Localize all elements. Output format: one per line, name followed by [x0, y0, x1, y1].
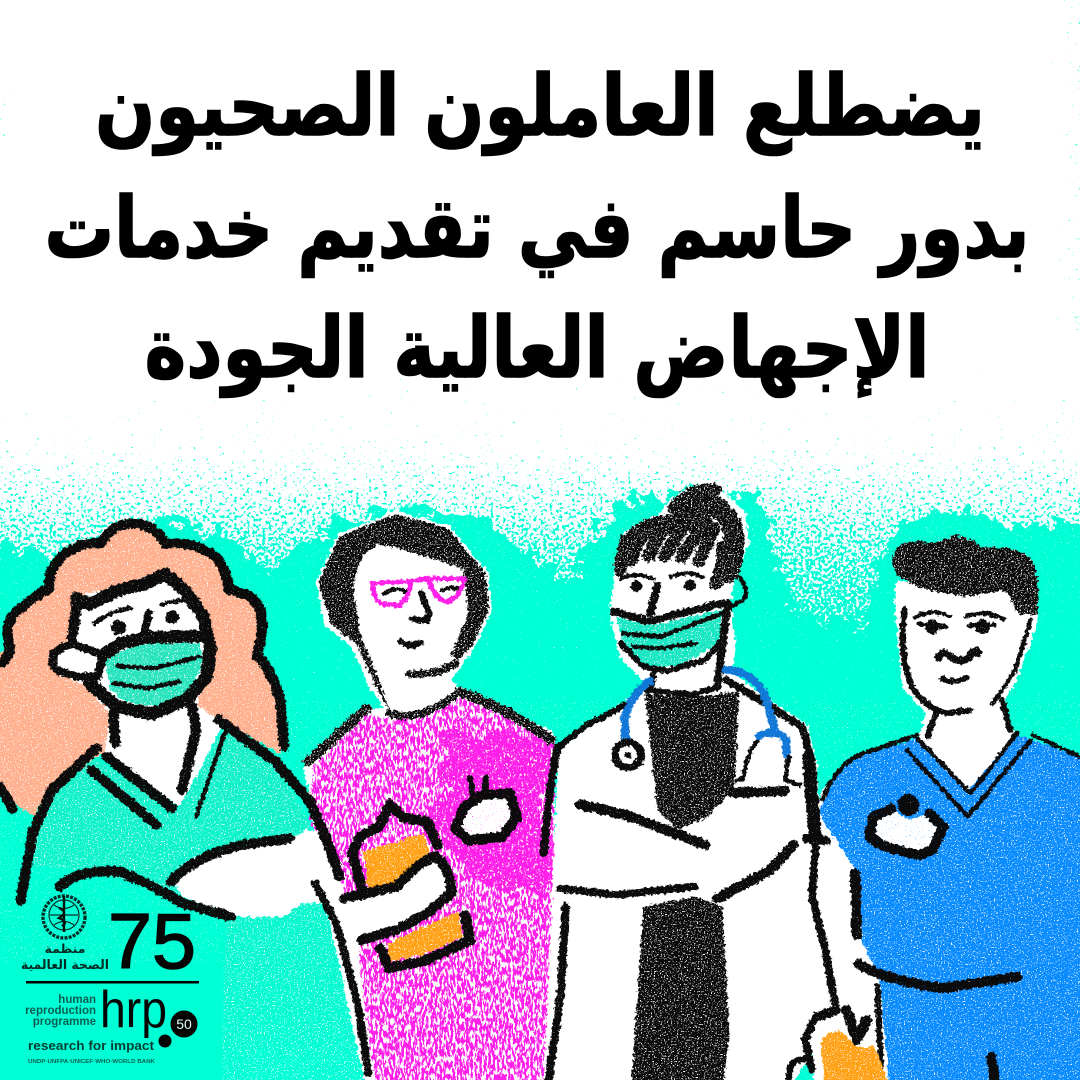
facial features and mask	[53, 574, 210, 714]
silhouette: face and neck	[816, 583, 1036, 1080]
pink shirt	[310, 697, 554, 1080]
face and mask outlines	[53, 574, 210, 714]
scrub and arm outlines	[21, 707, 369, 1073]
blue scrubs	[819, 735, 1080, 1080]
figure: doctor in white coat with stethoscope	[543, 490, 867, 1080]
figure: health worker with pink top and glasses	[307, 514, 554, 1080]
face and neck	[53, 573, 220, 803]
orange object held in hand	[821, 1030, 890, 1080]
surgical mask fill	[105, 642, 203, 707]
hrp wordmark: hrp	[100, 981, 167, 1039]
number 75: 75	[108, 897, 196, 985]
badge 50: 50	[176, 1016, 192, 1032]
badge 50	[170, 1010, 198, 1038]
WHO Arabic name	[21, 941, 109, 973]
coat outlines and crossed arms	[543, 680, 867, 1080]
sponsors line: UNDP·UNFPA·UNICEF·WHO·WORLD BANK	[28, 1059, 155, 1065]
surgical mask	[616, 610, 723, 667]
programme word 1: human	[58, 994, 96, 1006]
hrp dot	[158, 1034, 172, 1048]
face details	[915, 612, 1003, 681]
name badge	[455, 778, 517, 841]
face details	[384, 588, 461, 645]
black undershirt	[631, 692, 739, 1080]
icon: WHO emblem	[43, 896, 85, 938]
face and mask lines	[614, 573, 746, 695]
hair outline	[0, 523, 284, 808]
pink shirt denser wash	[434, 720, 548, 900]
name badge	[869, 794, 943, 855]
WHO name line 2: الصحة العالمية	[21, 958, 109, 973]
forearm and hand	[174, 828, 451, 1080]
hair fill	[0, 523, 284, 817]
white coat silhouette	[547, 490, 840, 1080]
logos block	[0, 896, 222, 1080]
title	[44, 57, 1030, 398]
WHO name line 1: منظمة	[45, 941, 85, 956]
bottle and hand outlines	[344, 804, 470, 968]
figure: health worker with curly hair and mask holding a bottle	[0, 523, 470, 1080]
solid backing behind logos	[0, 962, 222, 1080]
bottle label top	[363, 833, 431, 888]
silhouette: head and torso	[307, 514, 551, 1080]
bottle label bottom	[387, 912, 463, 962]
scrub top	[31, 728, 365, 1080]
research for impact tagline: research for impact	[28, 1038, 155, 1053]
magenta glasses	[373, 579, 465, 605]
programme name	[25, 994, 96, 1028]
stethoscope	[615, 670, 800, 785]
hair and bun	[620, 490, 734, 583]
divider line	[26, 981, 199, 984]
figure: health worker in blue scrubs	[816, 535, 1080, 1080]
programme word 3: programme	[33, 1016, 96, 1028]
water bottle	[344, 804, 470, 968]
programme word 2: reproduction	[25, 1005, 96, 1017]
collar and body outline	[822, 610, 1080, 1080]
hair	[892, 535, 1038, 615]
hair and head outline	[308, 514, 551, 762]
title line 3: الإجهاض العالية الجودة	[144, 299, 930, 398]
